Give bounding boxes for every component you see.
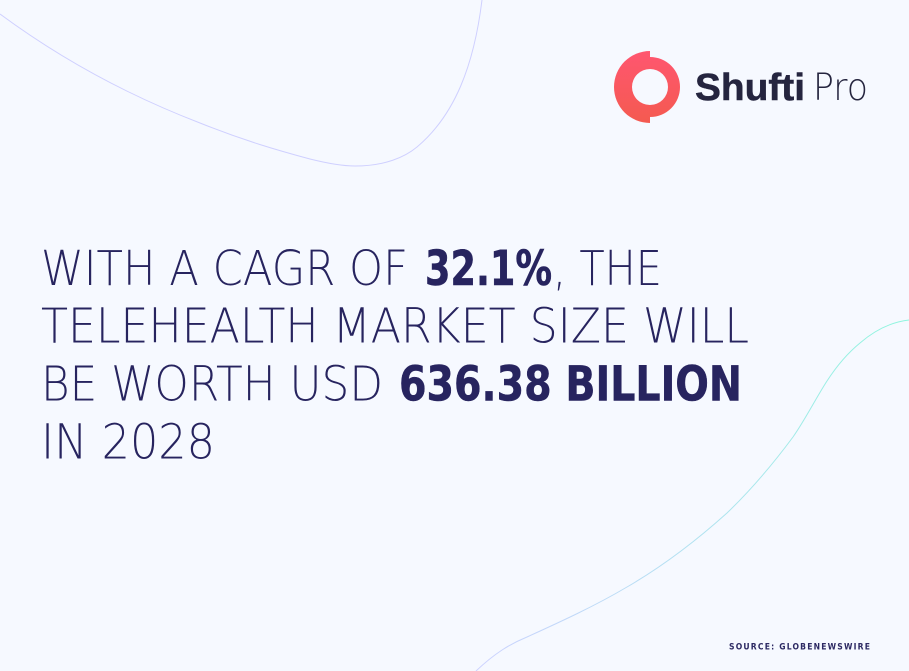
headline line 1: 32.1% xyxy=(425,241,552,297)
headline line 1: , THE xyxy=(553,241,662,297)
source note: SOURCE: GLOBENEWSWIRE xyxy=(729,642,870,652)
headline xyxy=(41,241,749,470)
logo wordmark: Pro: Pro xyxy=(813,66,868,109)
logo: Shufti Pro xyxy=(614,51,868,123)
icon: logo ring xyxy=(614,51,680,123)
headline line 2: TELEHEALTH MARKET SIZE WILL xyxy=(41,299,749,355)
logo wordmark: Shufti: Shufti xyxy=(695,67,805,109)
headline line 1: WITH A CAGR OF xyxy=(41,241,408,297)
decorative curve: bottom right xyxy=(476,320,909,671)
headline line 3 xyxy=(41,357,742,413)
headline line 3: 636.38 BILLION xyxy=(399,357,742,413)
headline line 3: BE WORTH USD xyxy=(41,357,383,413)
decorative curve: top xyxy=(0,0,482,166)
headline line 4: IN 2028 xyxy=(41,414,215,470)
headline line 1 xyxy=(41,241,662,297)
